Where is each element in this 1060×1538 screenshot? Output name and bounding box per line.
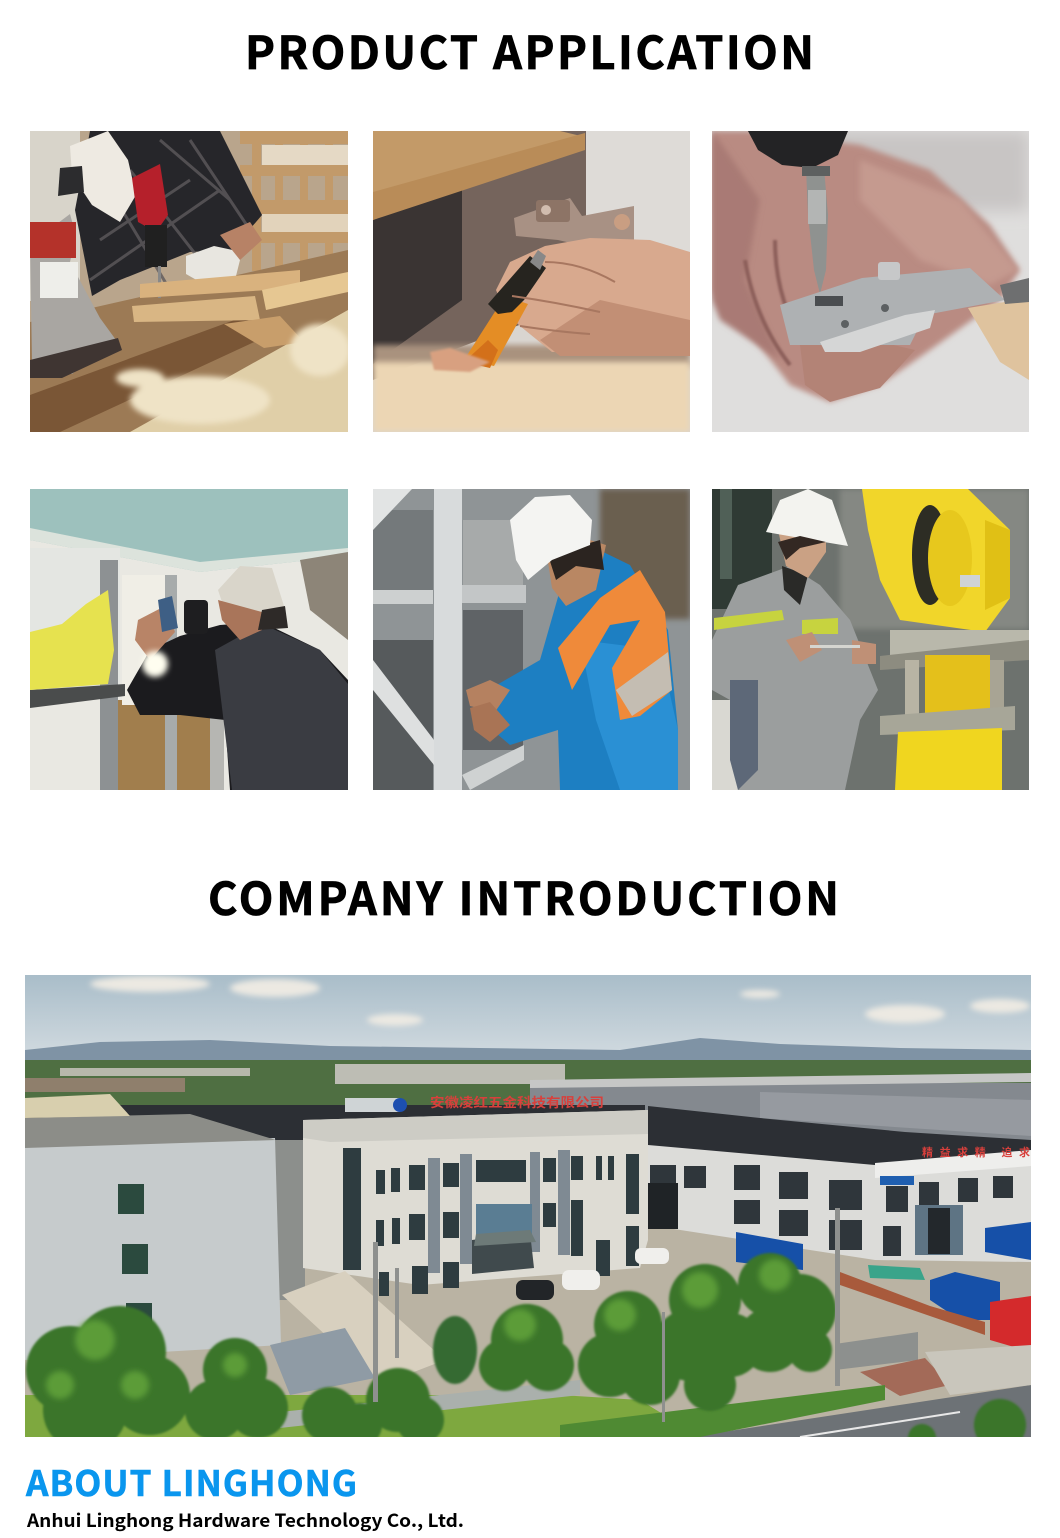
photo: aerial view of factory — [25, 975, 1031, 1452]
utility poles — [373, 1208, 840, 1422]
solar roof — [26, 1105, 645, 1140]
right wing building — [648, 1145, 1031, 1262]
photo: installer drilling ceiling frame — [30, 489, 348, 790]
left white building — [275, 1140, 305, 1300]
photo: warehouse worker in blue jacket — [373, 489, 690, 790]
photo: engineer at yellow robot arm — [712, 489, 1029, 790]
logo dot — [393, 1098, 407, 1112]
trees — [26, 1253, 1026, 1452]
sky — [25, 975, 1031, 1050]
main office building — [303, 1110, 648, 1285]
company name: Anhui Linghong Hardware Technology Co., Ltd. — [26, 1507, 464, 1533]
roof slogan: 精益求精 追求 — [922, 1144, 1030, 1160]
lawn and hedge — [25, 1380, 885, 1437]
blue containers — [736, 1222, 1031, 1352]
road — [690, 1345, 1031, 1437]
factory rear halls — [530, 1083, 1031, 1140]
title: company introduction: COMPANY INTRODUCTION — [208, 863, 839, 928]
ground base — [25, 1229, 1031, 1432]
photo: worker drilling wood — [30, 131, 350, 432]
cars — [516, 1248, 669, 1300]
gate sign — [835, 1332, 950, 1396]
photo: drill bit on a hinge — [712, 130, 1029, 432]
title: product application: PRODUCT APPLICATION — [245, 17, 814, 82]
heading: about linghong: ABOUT LINGHONG — [25, 1456, 357, 1507]
distant hills — [25, 1038, 1031, 1060]
distant greenery — [25, 1060, 1031, 1105]
rooftop sign: 安徽凌红五金科技有限公司 — [430, 1092, 604, 1111]
tent and shed — [270, 1271, 445, 1395]
photo: hand fitting a cabinet hinge — [373, 131, 690, 432]
